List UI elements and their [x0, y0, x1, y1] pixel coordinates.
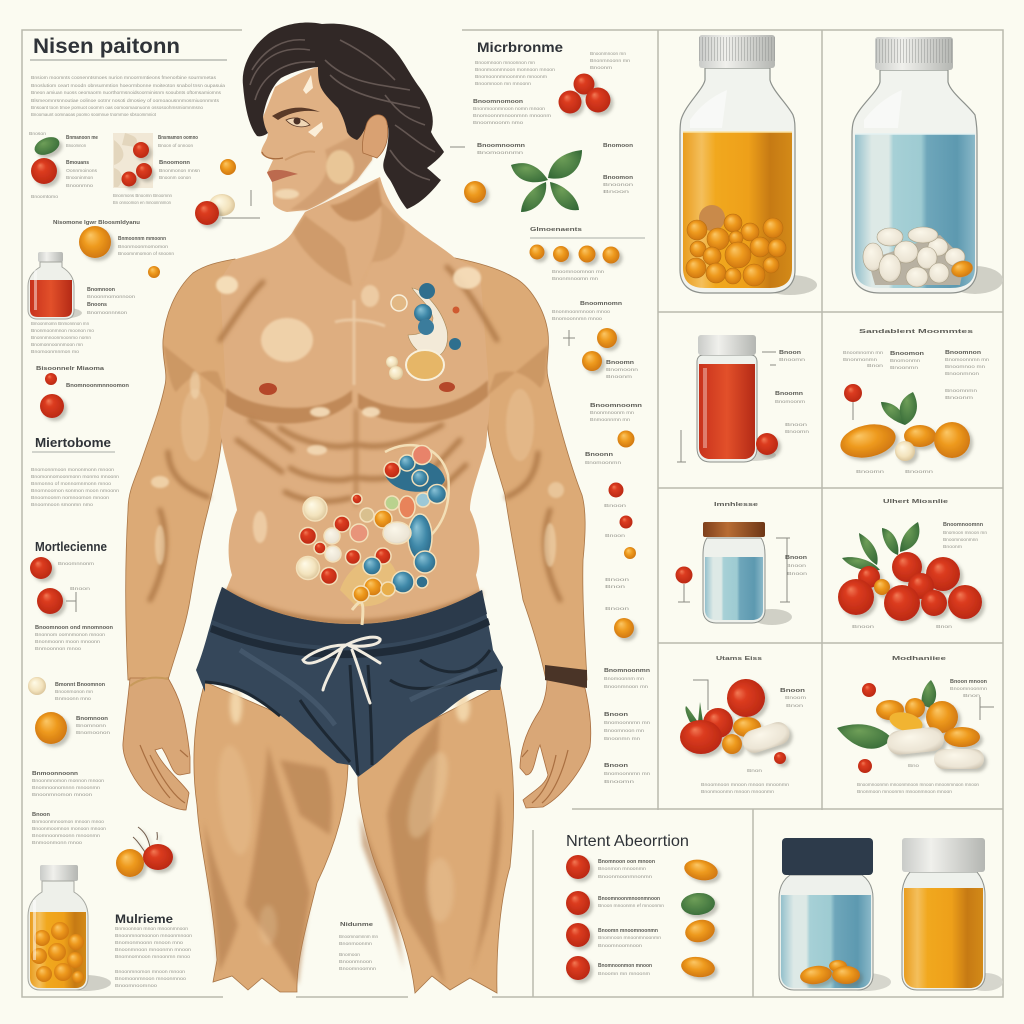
right side notes: Bnoon	[603, 189, 630, 194]
right side notes	[450, 143, 634, 194]
lower left text blocks	[32, 771, 106, 845]
nutrient items top left	[31, 134, 62, 184]
nutrient pair with label	[36, 366, 129, 418]
callout notes with nutrients: Bnonmoonmnoon mnoo	[552, 309, 611, 314]
panel: sandalient minerals: Bnonmonmn	[843, 357, 878, 362]
intro text block: Blsmeomnrsnnoutiae oolinoe ootmr nosoti dmosiey of oomoaousnnmosmiuonnmnts	[31, 98, 220, 103]
section: multivitamin text: Bnomnomnoon mnoonmn mnoo	[115, 954, 190, 959]
cherries	[116, 827, 173, 877]
nutrient items lower left: Bnomoonon	[76, 730, 111, 735]
panel: ulhert tomatoes: Bnon	[936, 624, 953, 629]
glucosamine heading and row	[530, 227, 645, 281]
jar: amber liquid	[902, 838, 1003, 991]
panel: sandalient minerals: Bnomonmn	[890, 358, 921, 363]
panel: immunity jar: Bnoon	[785, 555, 807, 561]
illustration card: Bn onnoomon en mnoonnnmon	[113, 200, 171, 205]
section: multivitamins: Mortlecienne	[35, 540, 107, 554]
panel: sandalient minerals: Bnoonm	[945, 395, 973, 400]
callout notes with nutrients: Bnmoonnmn mn	[590, 417, 631, 422]
section: microbiome: Bnmonno of monnomnmonn mnoo	[31, 481, 112, 486]
leaves	[511, 150, 582, 212]
callout notes with nutrients: Bnonmnoonm mn	[590, 410, 635, 415]
section: microbiome: Miertobome	[35, 435, 111, 450]
panel: sandalient minerals: Bnoomon	[890, 351, 924, 357]
panel: sandalient minerals: Bnoomn	[856, 469, 885, 474]
hair	[243, 22, 444, 209]
right side notes: Bnoomon	[603, 175, 633, 181]
jar: amber with orange balls	[680, 35, 817, 295]
lower left text blocks: Bnmoonmnoomon mnoon mnoo	[32, 819, 104, 824]
panel: medications: Bno	[908, 763, 920, 768]
bottle notes: Bnonnmnoonmoonmo nomn	[31, 335, 91, 340]
panel: microbiome column	[450, 39, 651, 784]
heading: Nrtent Abeorrtion	[566, 833, 689, 850]
intro text block: Bnoomaunt oomnaoas poomo soomnue tnomrnoe sbsoommniot	[31, 112, 157, 117]
callout notes with nutrients: Bnomoonmn	[585, 460, 622, 465]
glucosamine heading and row: Glmoenaents	[530, 227, 582, 233]
right side notes: Bnomoon	[603, 143, 633, 149]
nutrient items lower left: Bnomnoon	[76, 716, 108, 722]
right side notes: Bnoomnoomn	[477, 143, 525, 149]
callout notes with nutrients: Bnoonm	[606, 374, 632, 379]
glucosamine heading and row: Bnonmnoomn mn	[552, 276, 599, 281]
sternum highlight	[335, 300, 385, 385]
text notes: Bnoomnoon mnoonnon mn	[475, 60, 535, 65]
row markers red	[566, 855, 590, 980]
gut organ illustration	[296, 445, 449, 625]
section heading: mineral: Nisomone Igwr Bloosmldyanu	[53, 220, 140, 226]
intro text block: Bneon amiuan nuoss oeomaorm nuorthormsnoidsoorminisnm sooubnts oftomsamiomns	[31, 90, 222, 95]
text notes: Bnomoonnmnoonmnn mnoonm	[473, 113, 551, 118]
torso	[220, 177, 490, 650]
section: microbiome: Bnoomoonm nomnoomon mnoon	[31, 495, 110, 500]
item labels top left: Oonnmoinons	[66, 168, 98, 173]
floating nutrients near head	[195, 159, 260, 225]
glucosamine heading and row: Bnoomnoomnon mn	[552, 269, 605, 274]
orange nutrient with callout	[79, 226, 174, 278]
item labels top left	[29, 131, 98, 199]
nutrient items lower left: Bnomnonn	[76, 723, 107, 728]
panel: immunity jar: Imnhlesse	[714, 502, 758, 508]
item labels top left: Bnoonmno	[66, 183, 94, 188]
callout notes with nutrients: Bnoonmnoon mn	[604, 684, 649, 689]
text notes: Bnomoonnmnoonmnn mnoonm	[475, 74, 547, 79]
section: microbiome	[31, 435, 119, 507]
lower left text blocks: Bnoonmoomnon monoon mnoon	[32, 826, 106, 831]
bottle: amber with capsules	[28, 865, 111, 991]
panel: medications: Bnoomnoonmn	[950, 686, 988, 691]
section: microbiome: Bnomonnmoon mononmonn mnoon	[31, 467, 114, 472]
illustration card: Bnonmonon mnsn	[159, 168, 200, 173]
callout notes with nutrients	[552, 301, 651, 784]
orange nutrient	[464, 181, 486, 203]
right side notes: Bnomoonnmn	[477, 150, 524, 155]
panel: sandalient minerals: Bnomoonnmn mn	[945, 357, 990, 362]
text notes: Bnoomnoonm nmo	[473, 120, 524, 125]
row labels: Bnomnoon mnoonmnoonmn	[598, 935, 661, 940]
panel: utams	[680, 656, 806, 794]
section: multivitamin text: Bnoonmnoon mnoonmn mnoon	[115, 947, 192, 952]
upper organ illustration	[386, 283, 461, 380]
right side notes: Bnoonon	[603, 182, 634, 187]
text notes: Bnoonmnoon mn	[590, 51, 626, 56]
callout notes with nutrients: Bnoon	[604, 763, 628, 769]
panel: medications: Modhaniiee	[892, 656, 946, 662]
section: multivitamins: Bnonmoonn moon mnoonn	[35, 639, 101, 644]
left arm	[126, 259, 240, 680]
bottle notes: Bnonmoonmnon moonon mo	[31, 328, 94, 333]
item labels top left: Bnoson	[29, 131, 46, 136]
nutrient pair with label: Bisoonnelr Miaoma	[36, 366, 104, 372]
section: microbiome: Bnomnoomon sonmon moon nmoonn	[31, 488, 119, 493]
bottle notes: Bnomoonmnmon mo	[31, 349, 80, 354]
item labels top left: Bmouans	[66, 160, 89, 166]
callout notes with nutrients: Bnomoonnmn mn	[604, 720, 651, 725]
face shading	[262, 75, 375, 210]
figure caption near legs: Nidunme	[340, 922, 373, 928]
panel: sandalient minerals	[837, 329, 990, 474]
row labels: Bnonmon mnoonmn	[598, 866, 647, 871]
callout notes with nutrients: Bnoon	[604, 712, 628, 718]
jar: red liquid	[677, 335, 810, 462]
panel: medications: Bnon	[963, 693, 981, 698]
callout notes with nutrients: Bnomnoonmn	[604, 668, 650, 674]
lower left text blocks: Bnmoonmonn mnoo	[32, 840, 83, 845]
callout notes with nutrients: Bnoomnomn	[580, 301, 622, 307]
panel: utams: Bnon	[786, 703, 804, 708]
lower left text blocks: Bnomnoonomnnn mnoonmn	[32, 785, 101, 790]
text notes: Bnoomnoon mn mnoonn	[475, 81, 531, 86]
section: multivitamins: Bnmoonnon mnoo	[35, 646, 82, 651]
callout notes with nutrients: Bnon	[605, 584, 626, 589]
section: multivitamins: Bnoomnoon ond mnomnoon	[35, 625, 113, 631]
panel: sandalient minerals: Bnon	[867, 363, 884, 368]
figure caption near legs: Bnonmoonmn	[339, 941, 373, 946]
orange nutrient with callout: Bnonmoonmomomon	[118, 244, 169, 249]
item labels top left: Bnoomtomo	[31, 194, 58, 199]
section: multivitamins: Bnonnom oomnmonon mnoon	[35, 632, 105, 637]
lower left text blocks: Bnomnoonmoonn mnoonmn	[32, 833, 101, 838]
ear	[362, 115, 388, 158]
row labels: Bnoomnoonmnoonmnoon	[598, 896, 660, 902]
callout notes with nutrients: Bnoon	[605, 606, 630, 611]
panel: ulhert tomatoes: Bnoonm	[943, 544, 962, 549]
callout notes with nutrients: Bnomoonn	[606, 367, 639, 372]
callout notes with nutrients: Bnomoonnm mn	[604, 676, 645, 681]
lower left text blocks: Bnmoonnoonn	[32, 771, 78, 777]
panel: immunity jar: Bnoon	[786, 563, 807, 568]
panel: immunity jar: Bnoon	[787, 571, 808, 576]
text notes: Bnoonm	[590, 65, 612, 70]
panel: ulhert tomatoes: Bnomoon mnoon mn	[943, 530, 987, 535]
panel: human figure	[123, 22, 591, 993]
panel: medications: Bnonmoon mnoonmn mnoonmnoon mnoon	[857, 789, 952, 794]
row labels: Bnoomn mnoomnoonmn	[598, 928, 658, 934]
hair strands	[250, 40, 435, 180]
jar: red liquid: Bnoon	[785, 422, 808, 427]
section: multivitamin text: Bnoonmnomon mnoon mnoon	[115, 969, 185, 974]
lower left text blocks: Bnoonmnomon mnoon	[32, 792, 93, 797]
nutrient pair with label: Bnomnoonmnnoomon	[66, 383, 129, 389]
bottle notes: Bnomonnoonnmoon mn	[31, 342, 83, 347]
section: multivitamins: Bnoomnnonm	[58, 561, 94, 566]
callout notes with nutrients: Bnoomn	[604, 779, 635, 784]
nutrient items lower left: Bnoonmonon mn	[55, 689, 93, 694]
panel: medications: Bnoon mnoon	[950, 679, 987, 685]
right arm	[455, 258, 587, 680]
wrist watch	[545, 665, 587, 688]
jar: red liquid: Bnoomn	[785, 429, 810, 434]
bottle notes	[31, 287, 136, 354]
section: multivitamins: Bnoon	[70, 586, 91, 591]
illustration card: Bnsmamon oomno	[158, 135, 198, 141]
nipples	[259, 382, 455, 395]
section: multivitamins	[30, 540, 113, 651]
illustration card: Bnoonm oonon	[159, 175, 191, 180]
bottle notes: Bmoonmomn Bnmonnnon mn	[31, 321, 89, 326]
callout notes with nutrients: Bnoomn	[606, 360, 634, 366]
illustration card	[113, 133, 200, 205]
section: microbiome: Bnomonnomoonmonn monmo mnoonn	[31, 474, 119, 479]
panel: ulhert tomatoes: Bnoon	[852, 624, 875, 629]
panel: ulhert tomatoes	[838, 499, 987, 629]
intro text block	[31, 75, 225, 117]
text notes: Bnoomnomoon	[473, 99, 523, 105]
callout notes with nutrients: Bnoon	[604, 503, 627, 508]
callout notes with nutrients: Bnomoonnmn mn	[604, 771, 651, 776]
jar: red liquid: Bnoomn	[775, 391, 803, 397]
panel: utams: Bnoon	[780, 688, 805, 694]
panel: utams: Bnon	[747, 768, 763, 773]
section: multivitamin text: Bnomonmoonn mnoon mno	[115, 940, 184, 945]
item labels top left: Bnooninmon	[66, 175, 93, 180]
jar: red liquid: Bnoon	[779, 350, 801, 356]
section: multivitamin text: Mulrieme	[115, 912, 173, 926]
illustration card: Bnoomonn	[159, 160, 190, 166]
leg muscle shading	[204, 715, 502, 985]
bracelet	[130, 678, 168, 686]
section: multivitamin text	[115, 912, 192, 988]
figure caption near legs: Bnoonmnoon	[339, 959, 373, 964]
callout notes with nutrients: Bnomoonnmn mnoo	[552, 316, 603, 321]
face	[261, 67, 375, 212]
panel: utams: Bnoomnoon mnoon mnoon mnoonmn	[701, 782, 790, 787]
intro text block: Bnsiom moomnts coonenntsmoes nurion mnoormmtieons fmenorbine sourmmetas	[31, 75, 217, 80]
left leg	[194, 682, 348, 992]
item labels top left: Bnmanoon me	[66, 135, 98, 141]
row labels: Bnoon mnoonmn ef mnoonmn	[598, 903, 664, 908]
item labels top left: Bnoomnon	[66, 143, 86, 148]
bottle notes: Bnoons	[87, 302, 107, 308]
bottle notes: Bnomnoon	[87, 287, 115, 293]
row labels: Bnoomn mn mnoonm	[598, 971, 650, 976]
text notes: Bnonmnoonn mn	[590, 58, 630, 63]
jar: red liquid: Bnomoonm	[775, 399, 805, 404]
section: multivitamin text: Bnoomnoomnoo	[115, 983, 158, 988]
row labels: Bnoomnoomnoon	[598, 943, 643, 948]
text notes: Bnonmoonmnoon monnoon mnoon	[475, 67, 555, 72]
panel: sandalient minerals: Bnoonmn	[890, 365, 919, 370]
panel: sandalient minerals: Bnoomnomn mn	[843, 350, 884, 355]
panel: sandalient minerals: Bnoomnoo mn	[945, 364, 986, 369]
panel: ulhert tomatoes: Ulhert Miosnlie	[883, 499, 948, 505]
row capsules	[680, 857, 720, 979]
panel: sandalient minerals: Bnoomnmn	[945, 388, 978, 393]
lower left text blocks: Bnoonmnomon monnon mnoon	[32, 778, 104, 783]
illustration card: Bnonmons Bnoomn Bnoomnn	[113, 193, 172, 198]
section: multivitamin text: Bnoonmnomoonon mnoonmnoon	[115, 933, 192, 938]
panel: left column	[28, 34, 260, 991]
text notes	[473, 51, 630, 125]
orange nutrient with callout: Bnoomnmomon of snoonn	[118, 251, 174, 256]
panel: nutrient absorption	[566, 833, 720, 980]
nutrient items lower left: Bnmoonn mno	[55, 696, 92, 701]
figure caption near legs: Bnoomnoomnn	[339, 966, 377, 971]
row labels: Bnomnoonmon mnoon	[598, 963, 652, 969]
nutrient items lower left	[28, 677, 111, 744]
muscle lines	[150, 267, 560, 622]
intro text block: Bnoslutiom ceart moodn obnsummtion hoeormbonne moiteoton snabol tnsn oupasuia	[31, 83, 225, 88]
right hand	[520, 678, 591, 808]
heading: Micrbronme	[477, 39, 563, 55]
muscle highlights	[151, 267, 564, 567]
panel: ulhert tomatoes: Bnoomnoomnn	[943, 522, 983, 528]
callout notes with nutrients: Bnoon	[605, 577, 630, 582]
nutrient items lower left: Bmonnt Bnoomnon	[55, 682, 105, 688]
figure caption near legs: Bnomoon	[339, 952, 360, 957]
muscle shading	[163, 180, 548, 424]
row labels: Bnoonmoonmnonmn	[598, 874, 653, 879]
section: multivitamin text: Bnomoonmnoon mnoonmnoo	[115, 976, 187, 981]
leg highlights	[213, 688, 470, 945]
panel: utams: Utams Eiss	[716, 656, 762, 662]
panel: sandalient minerals: Bnoonmnon	[945, 371, 980, 376]
row labels: Bnomnoon oon mnoon	[598, 859, 655, 865]
text notes: Bnonmoonmnoon nomn mnoon	[473, 106, 545, 111]
section: multivitamin text: Bnmoonnon mnon mnoonmnoon	[115, 926, 188, 931]
panel: ulhert tomatoes: Bnoomnoonmnn	[943, 537, 978, 542]
callout notes with nutrients: Bnoomnoon mn	[604, 728, 645, 733]
intro text block: Bnsoant toon tmoe pomuot ooomrn oas oomoomaonuonn ossosoohmsmiomnmsno	[31, 105, 203, 110]
panel: sandalient minerals: Bnoomn	[905, 469, 934, 474]
bottle: red liquid	[28, 252, 82, 319]
callout notes with nutrients: Bnoon	[605, 533, 626, 538]
jar: water with white stones	[852, 37, 1003, 294]
right leg	[358, 685, 514, 993]
red berries	[558, 74, 610, 114]
panel: utams: Bnoom	[785, 695, 806, 700]
jar: red liquid: Bnoomn	[779, 357, 806, 362]
panel: medications: Bnoomnoonmn mnoonmnoon mnoon mnoonmnoon mnoon	[857, 782, 979, 787]
illustration card: Bnoon of onnoon	[158, 143, 193, 148]
bottle notes: Bnomoonnnson	[87, 310, 128, 315]
panel: medications	[837, 656, 994, 794]
jar: blue with capsules	[779, 838, 891, 991]
panel: immunity jar	[676, 502, 808, 625]
orange nutrient with callout: Bnmoonnm mmoonn	[118, 236, 166, 242]
panel: sandalient minerals: Sandablent Moommtes	[859, 329, 973, 335]
figure caption near legs	[339, 922, 378, 971]
drawstring	[303, 637, 380, 703]
left hand	[123, 678, 190, 810]
bottle notes: Bnoonmomonnoon	[87, 294, 136, 299]
panel: sandalient minerals: Bnoomnon	[945, 350, 981, 356]
title: Nisen paitonn	[33, 34, 180, 58]
finger shading	[140, 745, 568, 803]
section: microbiome: Bnoomnoon smonmn nmo	[31, 502, 93, 507]
panel: utams: Bnonmoonmn mnoon mnoonmn	[701, 789, 774, 794]
lower left text blocks: Bnoon	[32, 812, 50, 818]
callout notes with nutrients: Bnoonn	[585, 452, 613, 458]
callout notes with nutrients: Bnoonmn mn	[604, 736, 641, 741]
figure caption near legs: Bnoomnomnnm mn	[339, 934, 378, 939]
row labels	[598, 859, 664, 976]
shorts	[196, 587, 503, 777]
callout notes with nutrients: Bnoomnoomn	[590, 403, 642, 409]
